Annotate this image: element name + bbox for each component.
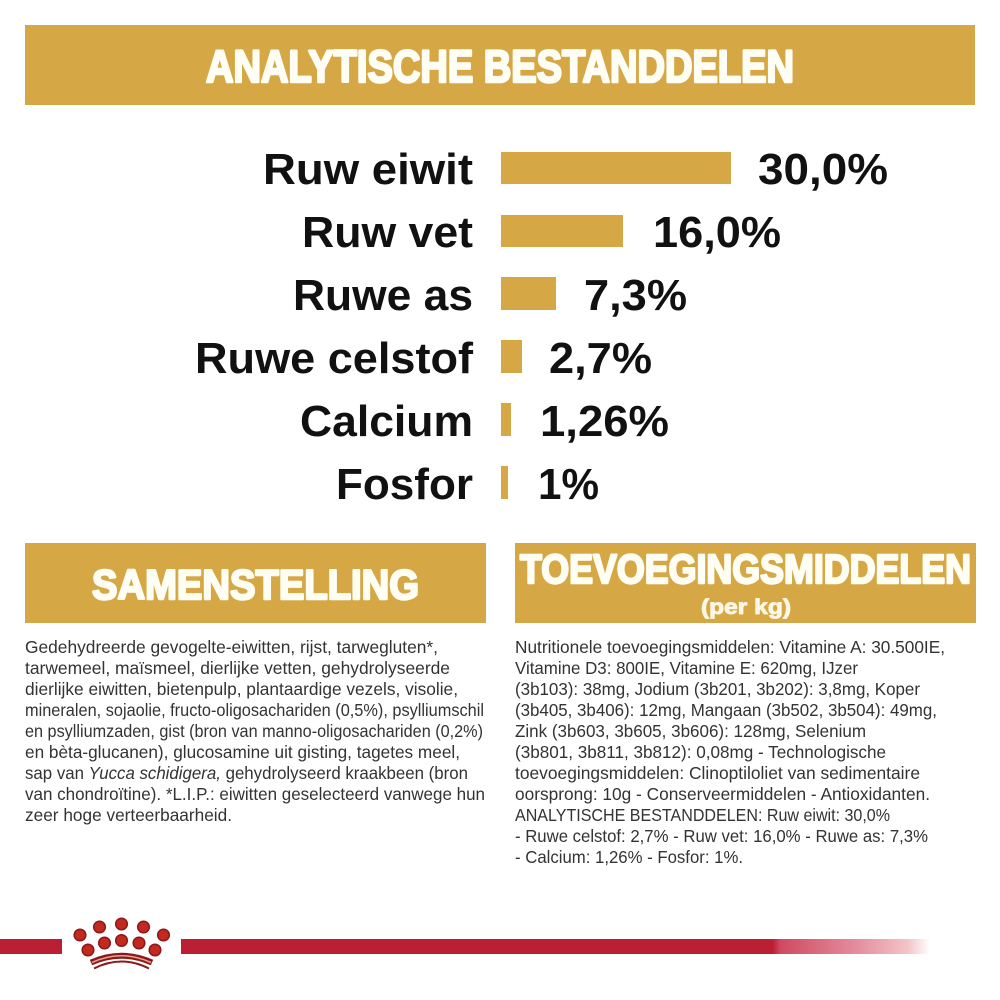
text block: toevoegingsmiddelen additives: oorsprong: 10g - Conserveermiddelen - Antioxidanten.: [515, 784, 930, 804]
panel: analytische bestanddelen heading banner: [25, 25, 975, 105]
row: calcium: 1,26%: [540, 397, 669, 446]
text block: samenstelling ingredients: Gedehydreerde gevogelte-eiwitten, rijst, tarwegluten*,: [25, 637, 438, 657]
text block: samenstelling ingredients: zeer hoge verteerbaarheid.: [25, 805, 232, 825]
text block: samenstelling ingredients: dierlijke eiwitten, bietenpulp, plantaardige vezels, visolie,: [25, 679, 458, 699]
row: ruwe celstof: 2,7%: [549, 334, 652, 383]
row: ruwe as: [293, 271, 687, 320]
panel: toevoegingsmiddelen heading banner: [515, 543, 976, 623]
row: ruw eiwit: Ruw eiwit: [263, 145, 473, 194]
text block: samenstelling ingredients: tarwemeel, maïsmeel, dierlijke vetten, gehydrolyseerde: [25, 658, 450, 678]
text block: toevoegingsmiddelen additives: Zink (3b603, 3b605, 3b606): 128mg, Selenium: [515, 721, 866, 741]
subheading: per kg: (per kg): [701, 596, 791, 619]
red footer stripe: right segment fading out: [181, 939, 930, 954]
text block: toevoegingsmiddelen additives: - Calcium: 1,26% - Fosfor: 1%.: [515, 847, 743, 867]
row: ruw vet: 16,0%: [653, 208, 781, 257]
text block: toevoegingsmiddelen additives: - Ruwe celstof: 2,7% - Ruw vet: 16,0% - Ruwe as: 7,3%: [515, 826, 928, 846]
row: ruw vet: Ruw vet: [302, 208, 473, 257]
panel: samenstelling heading banner: [25, 543, 486, 623]
row: ruw eiwit: [263, 145, 888, 194]
row: ruwe celstof: [195, 334, 652, 383]
text block: toevoegingsmiddelen additives: toevoegingsmiddelen: Clinoptiloliet van sedimentaire: [515, 763, 920, 783]
row: fosfor: Fosfor: [336, 460, 473, 509]
heading: samenstelling: SAMENSTELLING: [92, 561, 419, 608]
row: ruw eiwit: 30,0%: [758, 145, 888, 194]
row: ruwe as: 7,3%: [584, 271, 687, 320]
red footer stripe: left segment: [0, 939, 62, 954]
text block: samenstelling ingredients: mineralen, sojaolie, fructo-oligosachariden (0,5%), psylliumschil: [25, 700, 484, 720]
row: ruw vet: [302, 208, 781, 257]
text block: toevoegingsmiddelen additives: (3b801, 3b811, 3b812): 0,08mg - Technologische: [515, 742, 886, 762]
text block: toevoegingsmiddelen additives: Vitamine D3: 800IE, Vitamine E: 620mg, IJzer: [515, 658, 858, 678]
bar chart: analytical constituents: [195, 145, 888, 509]
text block: toevoegingsmiddelen additives: Nutritionele toevoegingsmiddelen: Vitamine A: 30.500IE,: [515, 637, 945, 657]
text block: toevoegingsmiddelen additives: [515, 637, 945, 867]
text block: samenstelling ingredients: sap van Yucca schidigera, gehydrolyseerd kraakbeen (bron: [25, 763, 468, 783]
text block: samenstelling ingredients: en psylliumzaden, gist (bron van manno-oligosachariden (0,2%): [25, 721, 483, 741]
row: ruwe celstof: Ruwe celstof: [195, 334, 473, 383]
text block: samenstelling ingredients: en bèta-glucanen), glucosamine uit gisting, tagetes meel,: [25, 742, 460, 762]
row: calcium: Calcium: [300, 397, 473, 446]
row: fosfor: 1%: [538, 460, 599, 509]
heading: analytische bestanddelen: ANALYTISCHE BESTANDDELEN: [206, 41, 794, 92]
row: calcium: [300, 397, 669, 446]
text block: toevoegingsmiddelen additives: ANALYTISCHE BESTANDDELEN: Ruw eiwit: 30,0%: [515, 805, 890, 825]
text block: toevoegingsmiddelen additives: (3b405, 3b406): 12mg, Mangaan (3b502, 3b504): 49mg,: [515, 700, 937, 720]
row: ruwe as: Ruwe as: [293, 271, 473, 320]
icon: royal canin crown logo: [74, 918, 169, 968]
text block: toevoegingsmiddelen additives: (3b103): 38mg, Jodium (3b201, 3b202): 3,8mg, Koper: [515, 679, 920, 699]
text block: samenstelling ingredients: [25, 637, 485, 825]
text block: samenstelling ingredients: van chondroïtine). *L.I.P.: eiwitten geselecteerd vanwege hun: [25, 784, 485, 804]
row: fosfor: [336, 460, 599, 509]
